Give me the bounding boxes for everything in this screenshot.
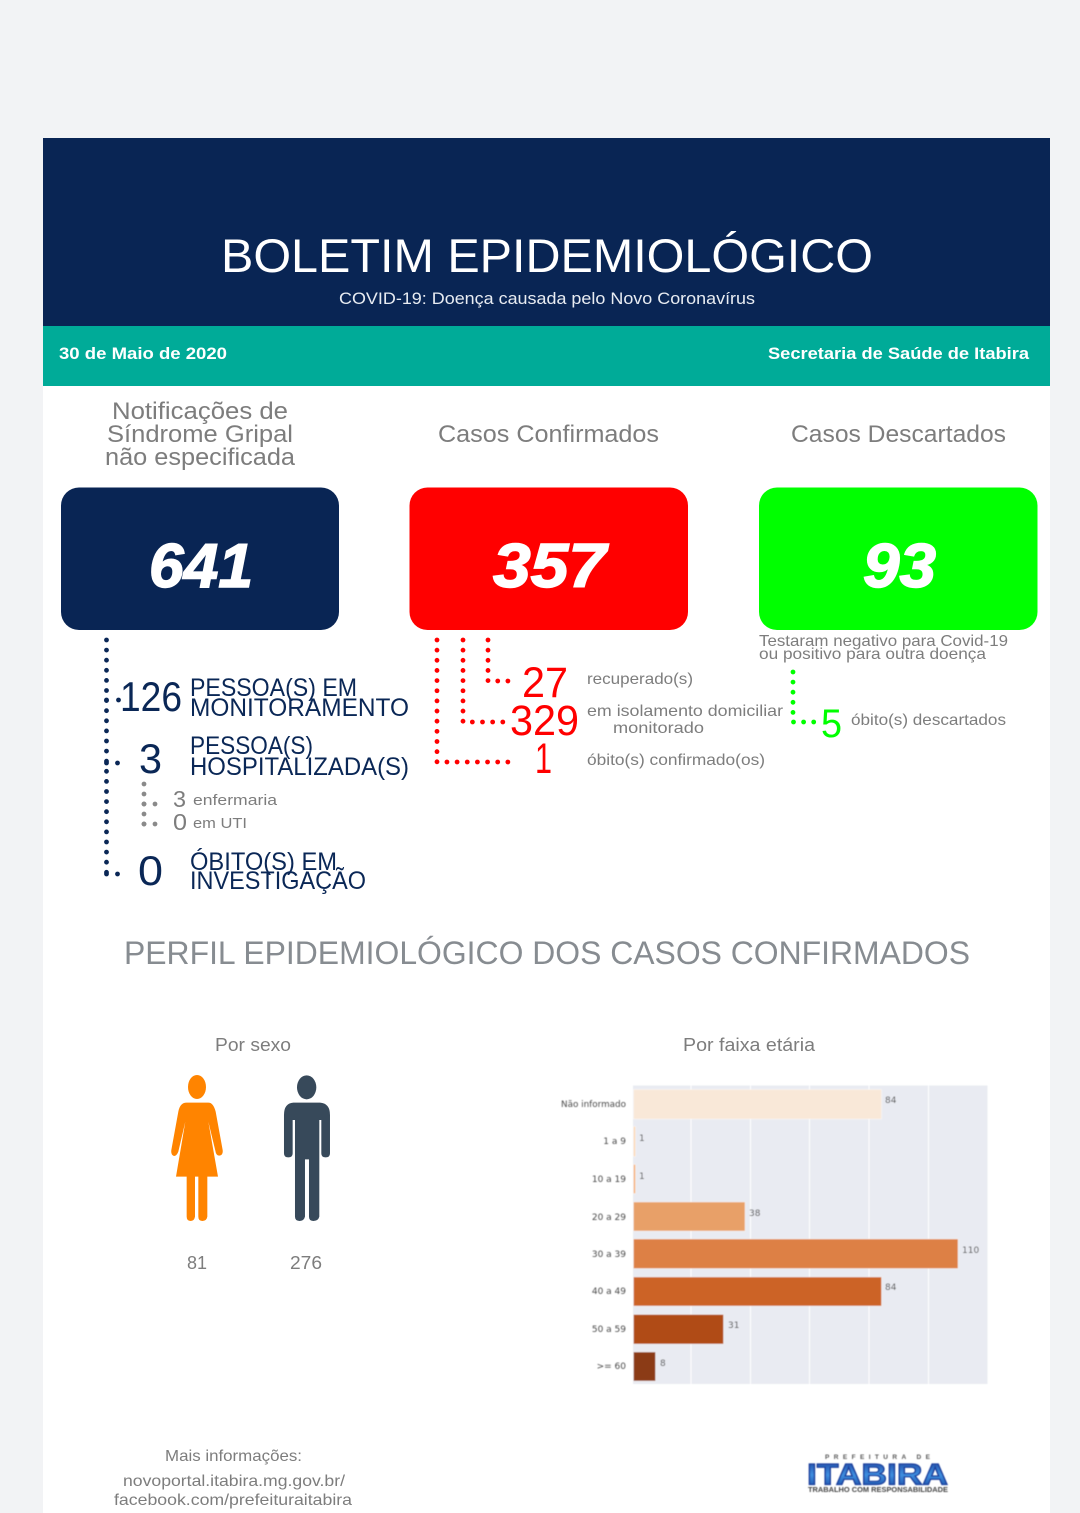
stat: ward: 3 [173, 786, 186, 812]
bar chart: age groups: 50 a 59 [592, 1325, 626, 1335]
bar chart: age groups: Não informado [561, 1100, 626, 1110]
card: notifications 641 [61, 488, 339, 630]
chart heading: by sex: Por sexo [215, 1035, 291, 1055]
stat: ICU: em UTI [193, 815, 247, 832]
bar chart: age groups: 1 [639, 1134, 645, 1144]
chart heading: by age: Por faixa etária [683, 1035, 816, 1055]
stat: hospitalized: PESSOA(S) [190, 732, 313, 760]
bar chart: age groups: 38 [749, 1209, 761, 1219]
stat: recovered [522, 659, 693, 707]
stat: home isolation: 329 [510, 697, 579, 745]
stat: ICU [173, 809, 247, 835]
navy dotted connector [106, 640, 119, 875]
stat: monitoring: MONITORAMENTO [190, 694, 409, 722]
stat: home isolation: em isolamento domiciliar [587, 703, 784, 720]
value: women: 81 [187, 1253, 207, 1273]
green dotted connector [793, 672, 816, 722]
card: discarded 93 [759, 488, 1038, 630]
stat: discarded deaths: 5 [821, 702, 842, 746]
gray dotted connector [144, 784, 156, 825]
header banner [43, 138, 1050, 326]
stat: home isolation [510, 697, 784, 745]
subtitle: COVID-19: Doença causada pelo Novo Coronavírus [339, 289, 755, 308]
stat: discarded deaths [821, 702, 1006, 746]
footer: more information: Mais informações: [165, 1448, 302, 1465]
note: discarded cases: ou positivo para outra doença [759, 646, 986, 663]
card: confirmed 357 [410, 488, 688, 630]
logo: Prefeitura de Itabira [807, 1454, 948, 1494]
date and department bar [43, 326, 1050, 386]
stat: deaths under investigation: ÓBITO(S) EM [190, 847, 337, 876]
icon: woman [171, 1075, 223, 1221]
section heading: profile: PERFIL EPIDEMIOLÓGICO DOS CASOS CONFIRMADOS [124, 935, 970, 971]
stat: confirmed deaths [535, 735, 765, 783]
stat: monitoring [120, 673, 409, 722]
bar chart: age groups: 40 a 49 [592, 1287, 626, 1297]
stat: hospitalized: HOSPITALIZADA(S) [190, 753, 409, 781]
bar chart: age groups: 1 [639, 1172, 645, 1182]
card: confirmed 357: 357 [493, 532, 609, 601]
stat: monitoring: 126 [120, 673, 182, 720]
bar chart: age groups: 84 [885, 1096, 897, 1106]
stat: ward [173, 786, 278, 812]
stat: recovered: recuperado(s) [587, 671, 693, 688]
note: discarded cases: Testaram negativo para Covid-19 [759, 633, 1008, 650]
card: notifications 641: 641 [149, 532, 253, 601]
heading: notifications: Notificações de [112, 398, 288, 425]
title: BOLETIM EPIDEMIOLÓGICO [221, 229, 873, 282]
icon: man [284, 1075, 330, 1221]
stat: monitoring: PESSOA(S) EM [190, 674, 357, 702]
department: Secretaria de Saúde de Itabira [768, 344, 1030, 363]
stat: recovered: 27 [522, 659, 568, 707]
heading: discarded cases: Casos Descartados [791, 421, 1006, 448]
value: men: 276 [290, 1253, 322, 1273]
bar chart: age groups [561, 1086, 988, 1384]
stat: hospitalized: 3 [139, 735, 162, 782]
card: discarded 93: 93 [863, 532, 936, 601]
stat: discarded deaths: óbito(s) descartados [851, 712, 1006, 729]
date: 30 de Maio de 2020 [59, 344, 227, 363]
note: discarded cases [759, 633, 1008, 663]
stat: deaths under investigation: 0 [138, 847, 163, 894]
footer: more information: novoportal.itabira.mg.gov.br/ [123, 1473, 346, 1490]
bar chart: age groups: >= 60 [597, 1362, 626, 1372]
bar chart: age groups: 30 a 39 [592, 1250, 626, 1260]
footer: more information: facebook.com/prefeituraitabira [114, 1492, 352, 1509]
heading: notifications: não especificada [105, 444, 296, 471]
stat: ward: enfermaria [193, 792, 278, 809]
logo: Prefeitura de Itabira: ITABIRA [807, 1458, 948, 1492]
heading: confirmed cases: Casos Confirmados [438, 421, 659, 448]
red dotted connectors [437, 640, 510, 762]
bar chart: age groups: 10 a 19 [592, 1175, 626, 1185]
heading: notifications: Síndrome Gripal [107, 421, 293, 448]
stat: confirmed deaths: óbito(s) confirmado(os) [587, 752, 765, 769]
stat: deaths under investigation: INVESTIGAÇÃO [190, 866, 366, 895]
bar chart: age groups: 110 [962, 1246, 979, 1256]
stat: confirmed deaths: 1 [535, 735, 552, 783]
bar chart: age groups: 1 a 9 [603, 1137, 626, 1147]
bar chart: age groups: 31 [728, 1321, 739, 1331]
bar chart: age groups: 8 [660, 1359, 666, 1369]
heading: notifications [105, 398, 296, 471]
bar chart: age groups: 20 a 29 [592, 1213, 626, 1223]
stat: home isolation: monitorado [613, 720, 704, 737]
logo: Prefeitura de Itabira: TRABALHO COM RESPONSABILIDADE [808, 1487, 948, 1494]
stat: hospitalized [139, 732, 409, 782]
footer: more information [114, 1448, 352, 1509]
logo: Prefeitura de Itabira: PREFEITURA DE [825, 1454, 931, 1461]
stat: ICU: 0 [173, 809, 187, 835]
stat: deaths under investigation [138, 847, 366, 895]
bar chart: age groups: 84 [885, 1283, 897, 1293]
